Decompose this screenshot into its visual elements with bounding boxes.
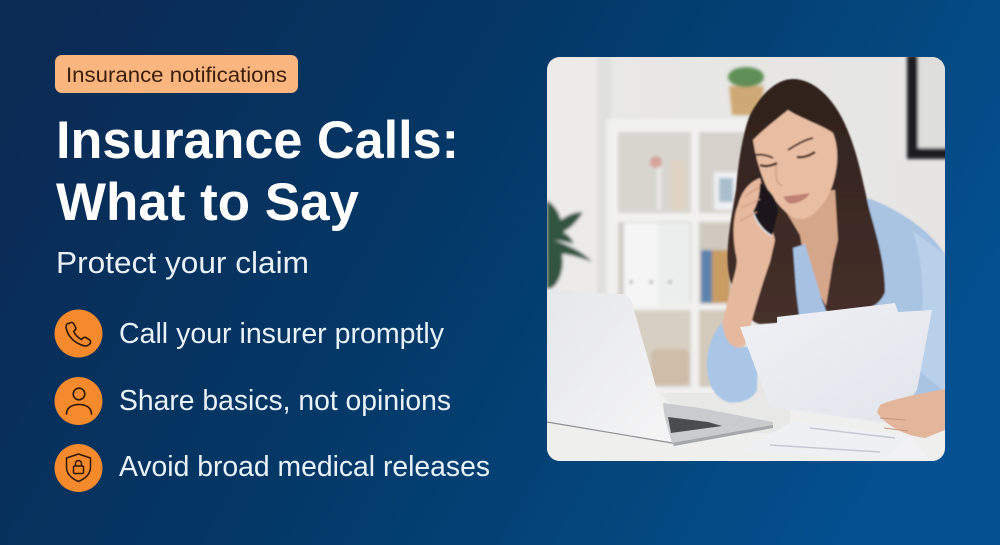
shelf items bbox=[624, 223, 658, 305]
list item: call your insurer bbox=[54, 310, 445, 358]
badge: Insurance notifications bbox=[55, 55, 298, 93]
shirt collar bbox=[793, 244, 829, 323]
wall frame bbox=[907, 55, 951, 159]
nose shadow bbox=[776, 165, 782, 186]
phone bbox=[753, 183, 778, 236]
far hand over paper bbox=[877, 389, 945, 438]
desk paper bbox=[774, 423, 790, 433]
list item: share basics bbox=[54, 377, 451, 425]
laptop bbox=[547, 290, 773, 446]
background room bbox=[547, 50, 951, 394]
woman bbox=[707, 79, 945, 402]
title: What to Say bbox=[56, 173, 360, 232]
fingers bbox=[740, 187, 760, 221]
badge: Insurance notifications: Insurance notifications bbox=[66, 63, 287, 87]
subtitle: Protect your claim bbox=[56, 246, 309, 280]
list item: avoid medical releases bbox=[54, 444, 490, 492]
shelf frame bbox=[607, 119, 747, 394]
label: Avoid broad medical releases bbox=[119, 451, 490, 483]
icon: shield with lock bbox=[54, 444, 102, 492]
shirt bbox=[860, 198, 945, 395]
label: Call your insurer promptly bbox=[119, 318, 445, 350]
hair bbox=[728, 79, 885, 324]
photo: woman on the phone reviewing papers bbox=[547, 50, 951, 461]
brows, eyes, lips bbox=[755, 138, 813, 158]
desk bbox=[547, 393, 945, 461]
left plant bbox=[547, 200, 592, 289]
title bbox=[56, 111, 459, 232]
title: Insurance Calls: bbox=[56, 111, 459, 170]
icon: person bbox=[54, 377, 102, 425]
face bbox=[753, 110, 837, 219]
sleeve bbox=[707, 322, 758, 402]
arm holding phone bbox=[722, 178, 775, 348]
wall plant bbox=[729, 86, 764, 115]
papers bbox=[740, 303, 932, 423]
label: Share basics, not opinions bbox=[119, 385, 451, 417]
icon: phone bbox=[54, 310, 102, 358]
neck and chest bbox=[786, 189, 840, 306]
